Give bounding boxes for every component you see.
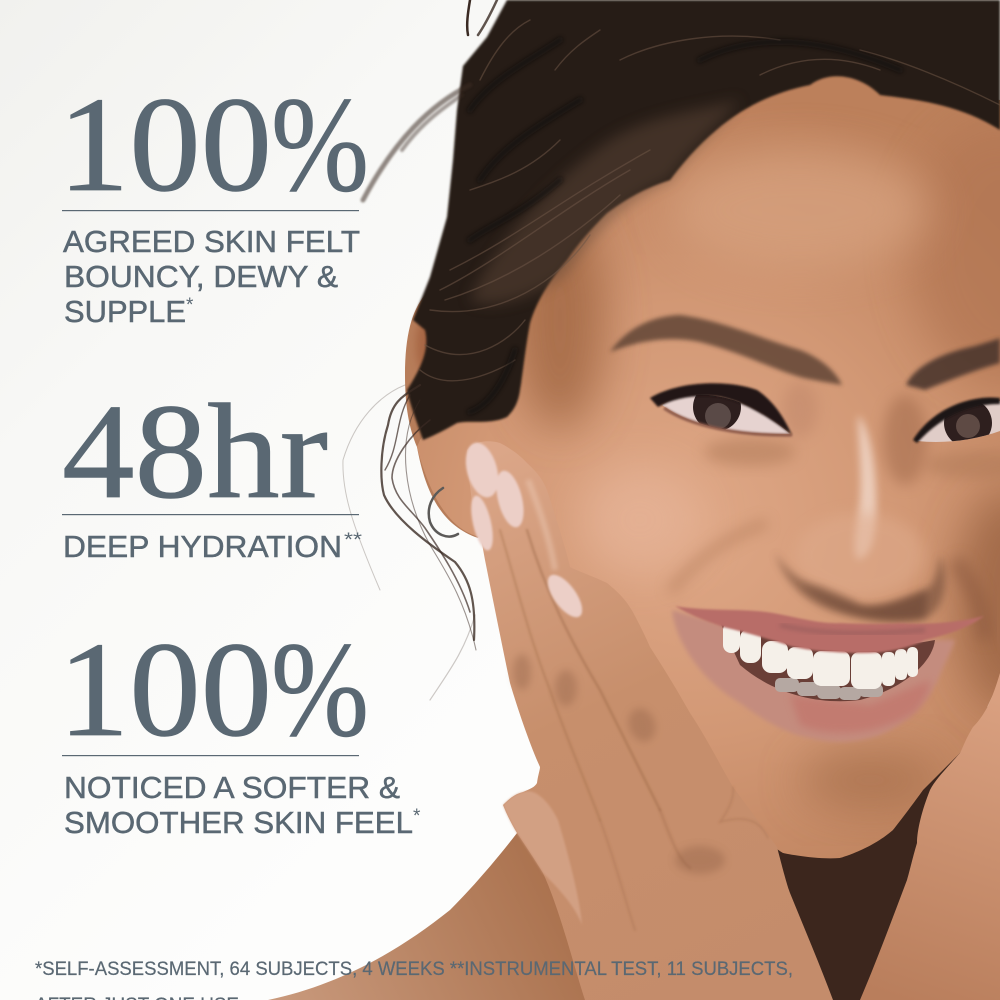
label: softer and smoother: SMOOTHER SKIN FEEL	[64, 805, 413, 840]
photo: smiling woman	[268, 0, 1000, 1000]
left eyebrow	[610, 315, 842, 385]
stat 1	[58, 70, 369, 329]
earring	[429, 488, 458, 537]
label: softer and smoother: NOTICED A SOFTER &	[64, 770, 400, 805]
hair	[407, 0, 1000, 440]
label: agreed skin felt: *	[186, 295, 194, 316]
lower lip	[672, 610, 955, 742]
face	[417, 70, 1000, 858]
label: agreed skin felt: SUPPLE	[64, 294, 186, 329]
face shading	[515, 120, 1000, 810]
label: agreed skin felt	[63, 224, 360, 329]
label: deep hydration: **	[344, 530, 363, 551]
number: 100%: %	[271, 615, 369, 765]
hair wisps	[343, 0, 497, 700]
label: agreed skin felt: AGREED SKIN FELT	[63, 224, 360, 259]
left eye	[650, 383, 792, 435]
neck shadow	[760, 700, 1000, 1000]
stat 2	[62, 377, 363, 564]
nails	[460, 439, 589, 623]
knuckles	[513, 654, 725, 874]
mouth	[672, 606, 984, 742]
finger creases	[500, 530, 768, 930]
stat 3	[58, 615, 421, 840]
hair strands	[420, 20, 1000, 412]
right eye	[913, 397, 1000, 447]
lower teeth	[775, 678, 883, 700]
shadow under nose	[775, 552, 945, 621]
label: deep hydration: DEEP HYDRATION	[63, 529, 342, 564]
finger highlight	[528, 480, 555, 570]
shoulder	[268, 800, 700, 1000]
lip colour	[790, 680, 930, 733]
nose	[775, 415, 945, 621]
number: 100%: 100	[58, 615, 272, 765]
number: 100%: 100	[58, 70, 272, 220]
upper teeth	[723, 622, 918, 689]
hair lighter band at temple	[470, 100, 740, 304]
nose bridge highlight	[855, 415, 876, 560]
nose tip	[795, 513, 925, 597]
left hand	[460, 439, 833, 1000]
ear	[405, 295, 520, 538]
number: 48hr: 48hr	[62, 377, 328, 527]
number: 100%: %	[271, 70, 369, 220]
right eyebrow	[906, 338, 1000, 390]
footnote: *SELF-ASSESSMENT, 64 SUBJECTS, 4 WEEKS **INSTRUMENTAL TEST, 11 SUBJECTS,	[35, 959, 793, 980]
mouth interior	[720, 622, 935, 701]
ear shading	[416, 305, 460, 385]
thumb	[503, 791, 582, 925]
upper lip	[675, 606, 984, 653]
right hand	[860, 673, 1000, 1000]
label: softer and smoother	[64, 770, 421, 840]
footnote	[35, 959, 793, 1000]
label: agreed skin felt: BOUNCY, DEWY &	[64, 259, 338, 294]
label: softer and smoother: *	[413, 806, 421, 827]
